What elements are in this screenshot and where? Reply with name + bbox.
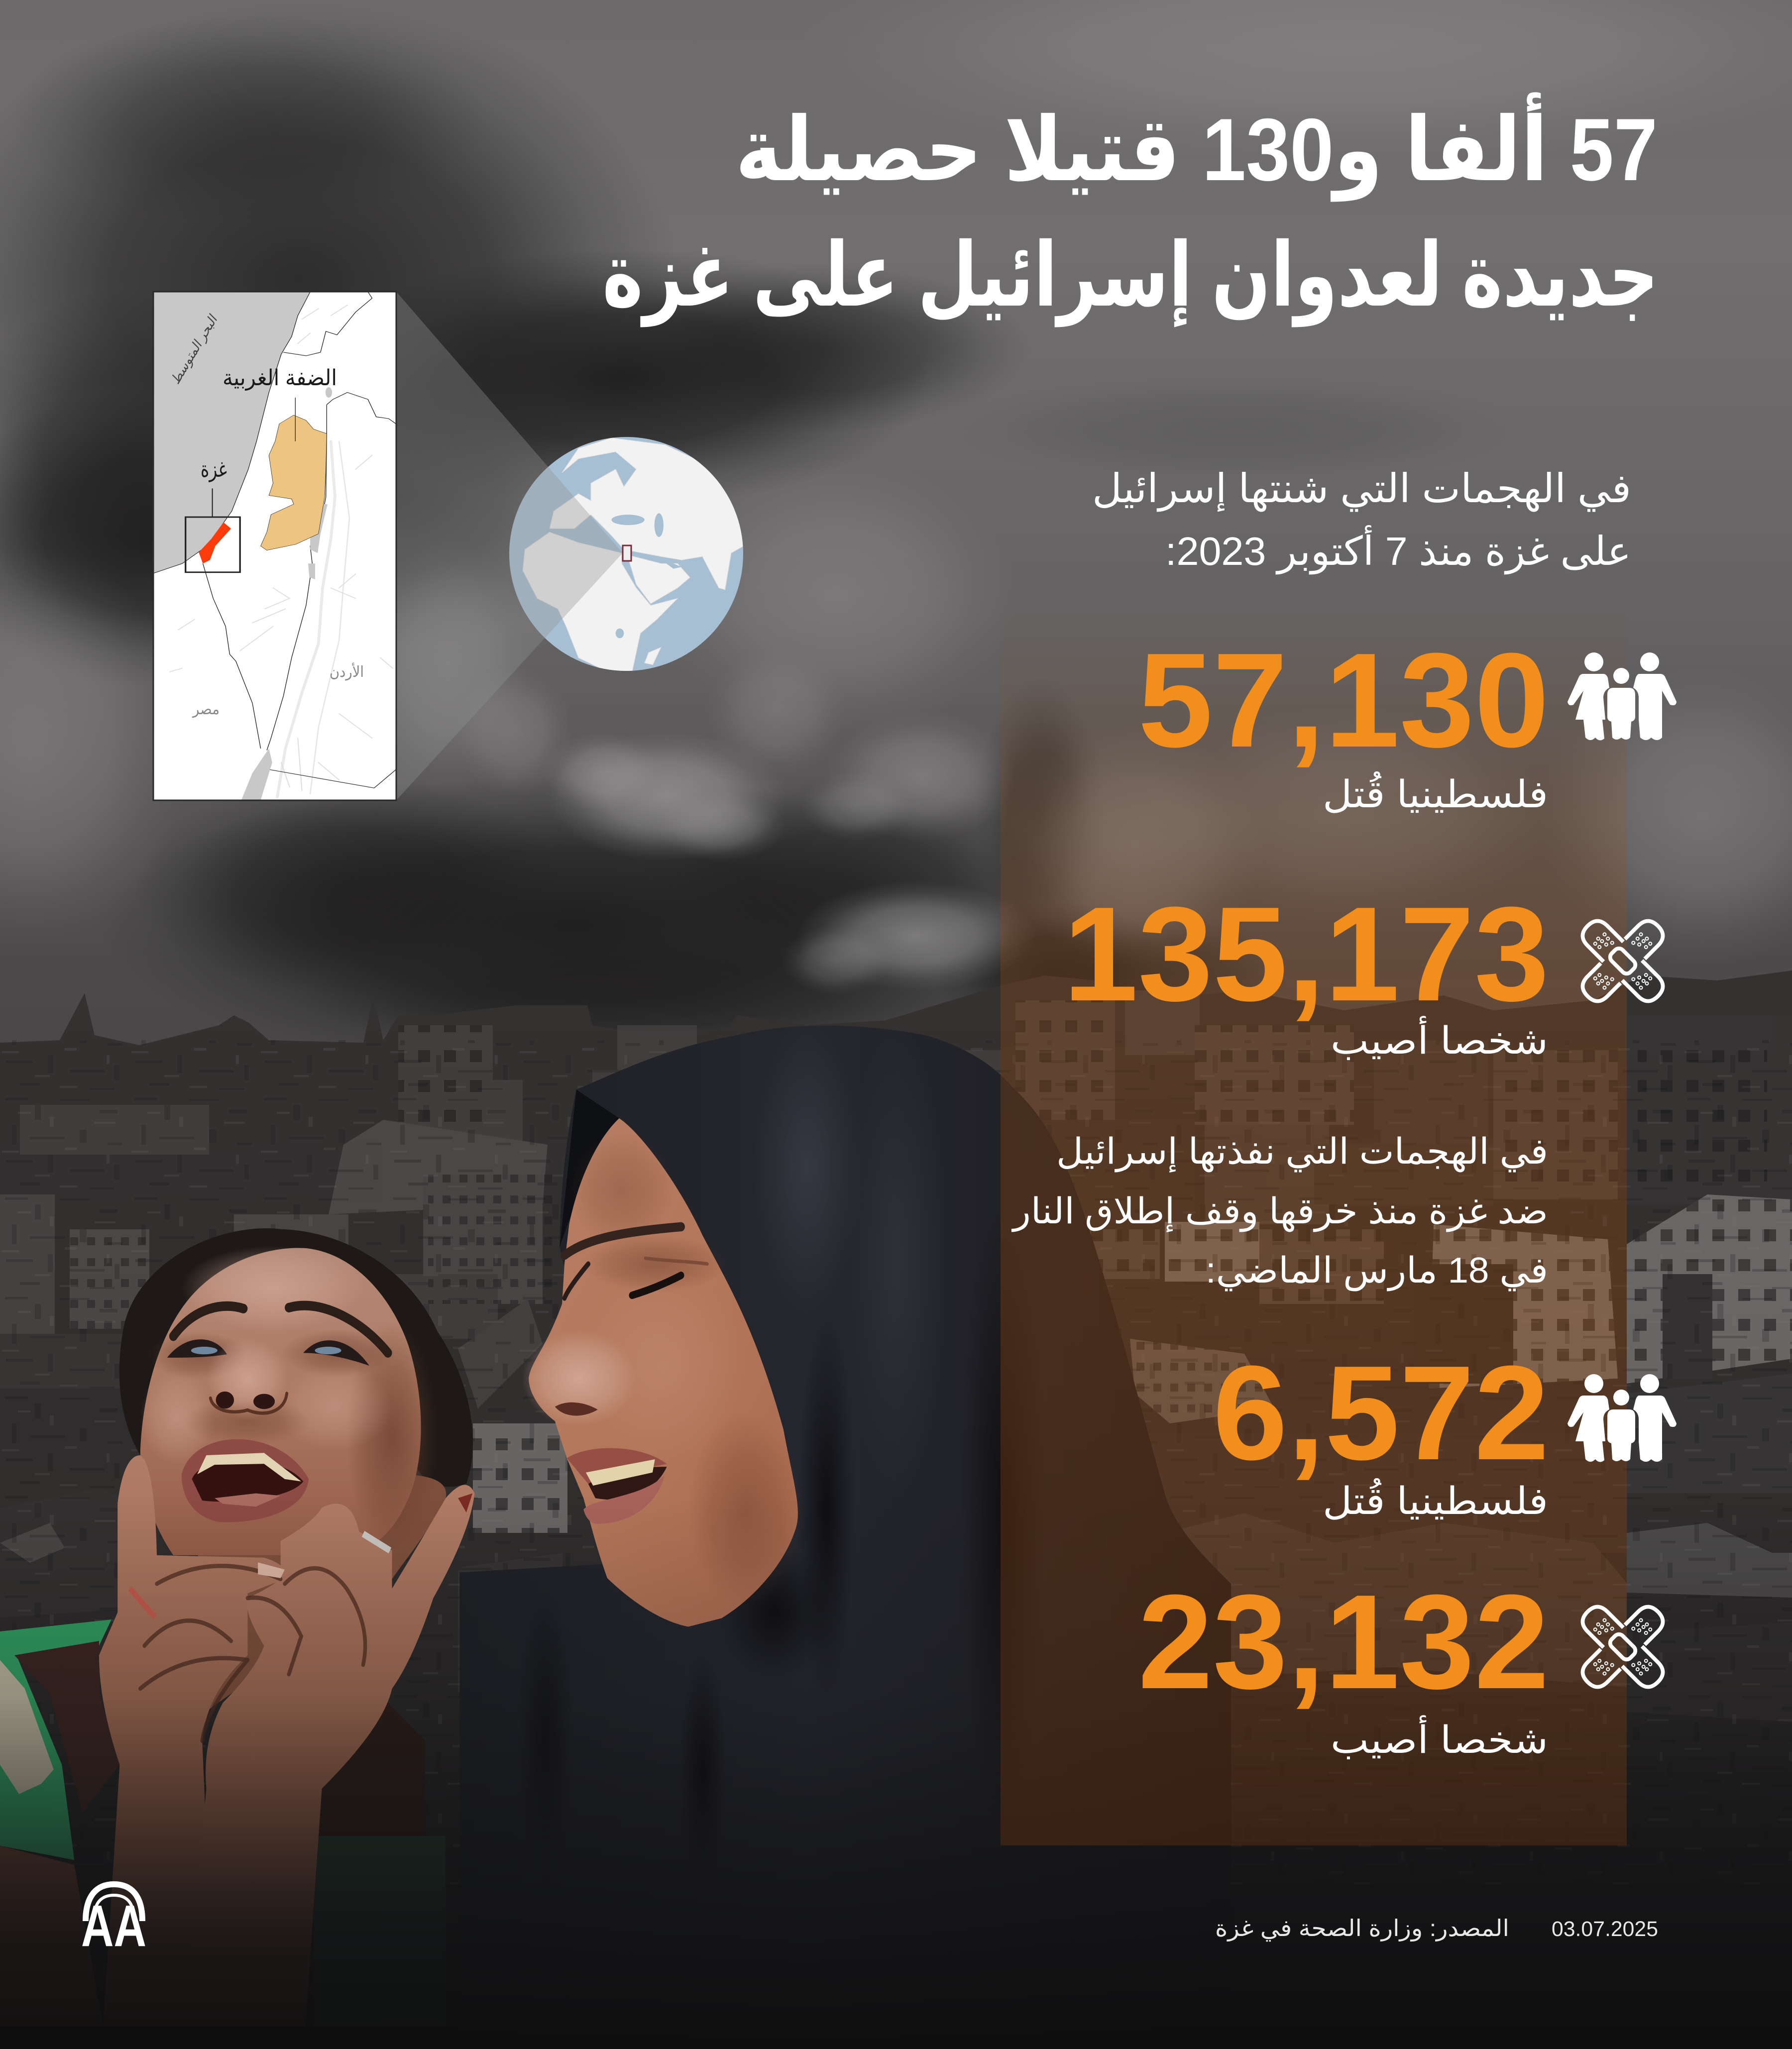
stat: injured since October 2023 [1063,879,1668,1062]
intro text: since March 18: في 18 مارس الماضي: [1206,1251,1548,1292]
globe locator [509,437,744,672]
number: 23,132 [1138,1567,1549,1717]
map label: West Bank: الضفة الغربية [223,366,337,391]
girl: face [140,1248,421,1555]
globe: Arabia [627,555,690,604]
map: Gaza [199,522,231,563]
girl: nose [206,1339,289,1419]
map label: Jordan: الأردن [330,662,364,680]
icon: bandage [1578,1602,1668,1692]
stat: killed since March 18 [1213,1338,1677,1522]
girl: open mouth [182,1439,309,1522]
bottom dark fade [0,1493,1792,2049]
zoom cone from map to globe [396,292,623,800]
woman: face shading [522,1133,802,1607]
number: 135,173 [1063,879,1549,1029]
title [602,92,1659,327]
globe: Eurasia [550,438,744,590]
intro text: since March 18 [1011,1132,1548,1292]
date: 03.07.2025 [1552,1917,1658,1941]
map: Dead Sea and Red Sea [241,387,332,800]
girl: clothing [0,1619,446,2027]
number: 57,130 [1138,626,1549,775]
map: West Bank [261,415,327,550]
globe: Madagascar [645,647,661,665]
intro text: since October 7: في الهجمات التي شنتها إسرائيل [1092,466,1631,512]
map label: Egypt: مصر [192,701,220,718]
map label: Mediterranean: البحر المتوسط [168,312,221,387]
photo: crying girl [0,1228,474,2027]
photo: crying woman in hijab [459,1018,1231,2049]
number: 6,572 [1213,1338,1549,1488]
stat: killed since October 2023 [1138,626,1677,816]
intro text: since March 18: في الهجمات التي نفذتها إسرائيل [1056,1132,1548,1173]
map label: Gaza: غزة [201,457,227,482]
label: شخصا أصيب [1331,1715,1548,1761]
woman: hijab [459,1026,1231,2049]
map: borders [203,292,396,788]
globe: Africa [523,532,677,672]
logo: Anadolu Agency [81,1884,146,1959]
woman: nostril [555,1402,598,1416]
girl: hair [119,1228,473,1487]
icon: family [1568,1374,1677,1462]
girl: face shading [140,1246,438,1550]
girl: ear and neck [198,1474,446,1717]
orange translucent panel [1001,608,1627,1845]
source: المصدر: وزارة الصحة في غزة [1215,1915,1509,1942]
title: 57 ألفا و130 قتيلا حصيلة [735,92,1658,202]
intro text: since March 18: ضد غزة منذ خرقها وقف إطلاق النار [1011,1191,1548,1232]
label: شخصا أصيب [1331,1016,1548,1062]
icon: bandage [1578,916,1668,1006]
logo: Anadolu Agency: AA [81,1893,146,1959]
icon: family [1568,652,1677,741]
intro text: since October 7 [1092,466,1631,575]
woman: mouth [567,1448,667,1524]
woman: face [529,1118,798,1627]
globe location marker [623,545,631,561]
map: Mediterranean Sea [153,292,310,573]
map: Gaza box and leaders [186,398,295,572]
label: فلسطينيا قُتل [1323,1478,1548,1522]
stat: injured since March 18 [1138,1567,1668,1761]
intro text: since October 7: على غزة منذ 7 أكتوبر 2023: [1165,525,1631,575]
label: فلسطينيا قُتل [1323,771,1548,816]
background: ruined city [0,971,1792,2049]
map: terrain relief [170,305,393,797]
girl: eyebrows and eyes [167,1305,388,1366]
locator map panel [153,292,396,800]
woman: eyebrow and closed eye [564,1227,707,1298]
woman: hijab folds [517,1018,1045,1892]
girl: hands [99,1455,474,2027]
